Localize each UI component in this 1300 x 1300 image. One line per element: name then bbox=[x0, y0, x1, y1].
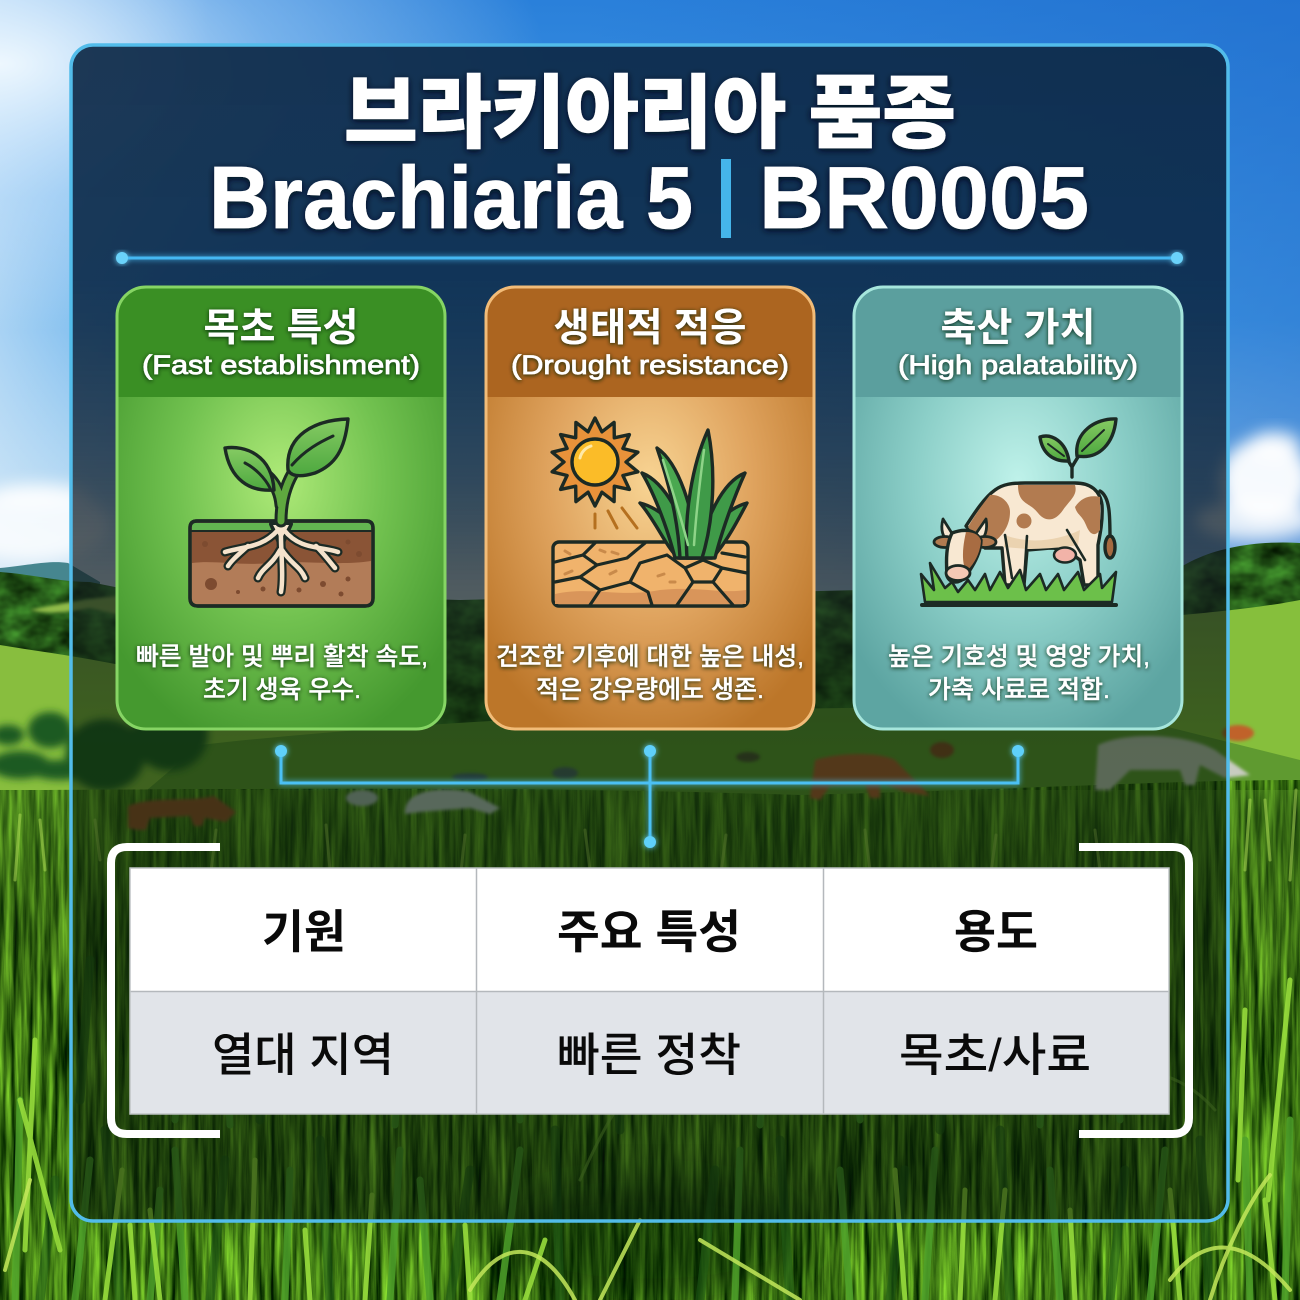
table bracket frame bbox=[111, 847, 1189, 1134]
card heading bbox=[511, 297, 789, 380]
title bbox=[209, 49, 1089, 247]
card: forage traits bbox=[116, 286, 446, 730]
card heading: (Drought resistance) bbox=[511, 350, 789, 380]
table value row: 빠른 정착 bbox=[557, 1029, 741, 1081]
card description bbox=[888, 643, 1150, 704]
table header row: 기원 bbox=[262, 906, 346, 958]
table value row: 목초/사료 bbox=[899, 1029, 1091, 1081]
table header row bbox=[262, 906, 1038, 958]
card heading: 생태적 적응 bbox=[554, 297, 746, 353]
card description bbox=[496, 643, 804, 704]
distant hills bbox=[0, 562, 100, 610]
card description: 높은 기호성 및 영양 가치, bbox=[888, 643, 1150, 671]
table value row: 열대 지역 bbox=[212, 1029, 394, 1081]
grazing cattle bbox=[128, 725, 1254, 830]
title divider line bbox=[116, 252, 1183, 264]
table value row bbox=[212, 1029, 1091, 1081]
table header row: 용도 bbox=[954, 906, 1038, 958]
summary table bbox=[130, 868, 1169, 1114]
card heading: 목초 특성 bbox=[204, 297, 358, 353]
title: Brachiaria 5 bbox=[209, 148, 693, 247]
icon: seedling with roots bbox=[190, 419, 373, 606]
card description bbox=[136, 643, 428, 704]
card description: 건조한 기후에 대한 높은 내성, bbox=[496, 643, 804, 671]
card heading bbox=[898, 297, 1138, 380]
card: ecological adaptation bbox=[485, 286, 815, 730]
icon: sun, grass and cracked earth bbox=[552, 418, 748, 606]
card description: 적은 강우량에도 생존. bbox=[536, 676, 764, 704]
title: BR0005 bbox=[759, 148, 1089, 247]
card: livestock value bbox=[853, 286, 1183, 730]
card description: 가축 사료로 적합. bbox=[928, 676, 1110, 704]
card description: 빠른 발아 및 뿌리 활착 속도, bbox=[136, 643, 428, 671]
title: 브라키아리아 품종 bbox=[344, 49, 956, 165]
table header row: 주요 특성 bbox=[557, 906, 741, 958]
grass blades bbox=[5, 790, 1296, 1300]
card heading bbox=[142, 297, 420, 380]
card heading: (High palatability) bbox=[898, 350, 1138, 380]
card heading: (Fast establishment) bbox=[142, 350, 420, 380]
icon: grazing cow with leaves bbox=[921, 419, 1116, 605]
card description: 초기 생육 우수. bbox=[203, 676, 361, 704]
connector lines bbox=[275, 745, 1024, 848]
card heading: 축산 가치 bbox=[940, 297, 1096, 353]
sunlit meadows bbox=[0, 645, 460, 810]
